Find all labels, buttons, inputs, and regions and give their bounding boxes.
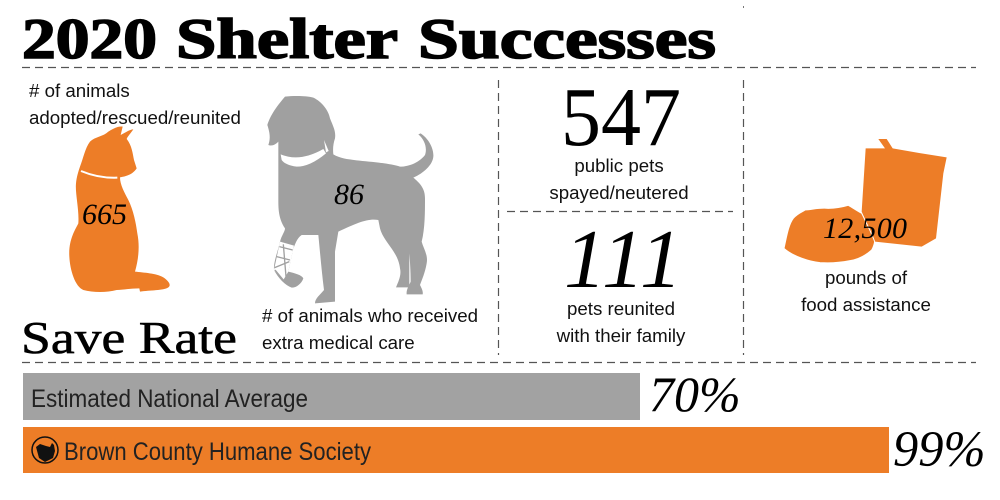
icon: food bag and bowl <box>784 139 947 263</box>
number: 12,500: 12,500 <box>823 212 907 245</box>
text: adopted caption: # of animals <box>29 80 130 101</box>
number: 547: 547 <box>561 71 681 164</box>
text: adopted caption: adopted/rescued/reunited <box>29 107 241 128</box>
panel: food assistance <box>784 139 947 315</box>
bar: Brown County <box>23 427 889 473</box>
title: Shelter <box>176 8 398 71</box>
title <box>22 8 716 71</box>
text: spay caption: spayed/neutered <box>549 182 689 203</box>
icon: logo <box>32 437 58 463</box>
icon: grey dog with bandaged leg <box>267 96 433 303</box>
text: reunited caption <box>556 298 686 346</box>
heading: save rate: Save Rate <box>21 312 237 363</box>
text: medical caption <box>262 305 478 353</box>
label: national average: Estimated National Average <box>31 385 308 413</box>
text: spay caption <box>549 155 689 203</box>
title: 2020 <box>22 8 157 71</box>
label: Brown County: Brown County Humane Society <box>64 438 371 466</box>
value: 70%: 70% <box>649 366 741 422</box>
number: 86: 86 <box>334 178 364 211</box>
text: food caption <box>801 267 931 315</box>
text: food caption: food assistance <box>801 294 931 315</box>
title: Successes <box>418 8 716 71</box>
text: adopted caption <box>29 80 241 128</box>
icon: orange cat <box>69 127 170 292</box>
value: 99%: 99% <box>893 421 986 477</box>
number: 665: 665 <box>82 198 127 231</box>
panel: animals adopted <box>29 80 241 292</box>
panel: reunited <box>556 213 686 346</box>
text: reunited caption: with their family <box>556 325 686 346</box>
text: food caption: pounds of <box>825 267 908 288</box>
panel: spayed neutered <box>549 71 689 203</box>
number: 111: 111 <box>564 213 682 306</box>
text: reunited caption: pets reunited <box>567 298 675 319</box>
text: medical caption: extra medical care <box>262 332 415 353</box>
text: spay caption: public pets <box>574 155 664 176</box>
text: medical caption: # of animals who received <box>262 305 478 326</box>
panel: medical care <box>262 96 478 353</box>
bar: national average <box>23 373 640 420</box>
